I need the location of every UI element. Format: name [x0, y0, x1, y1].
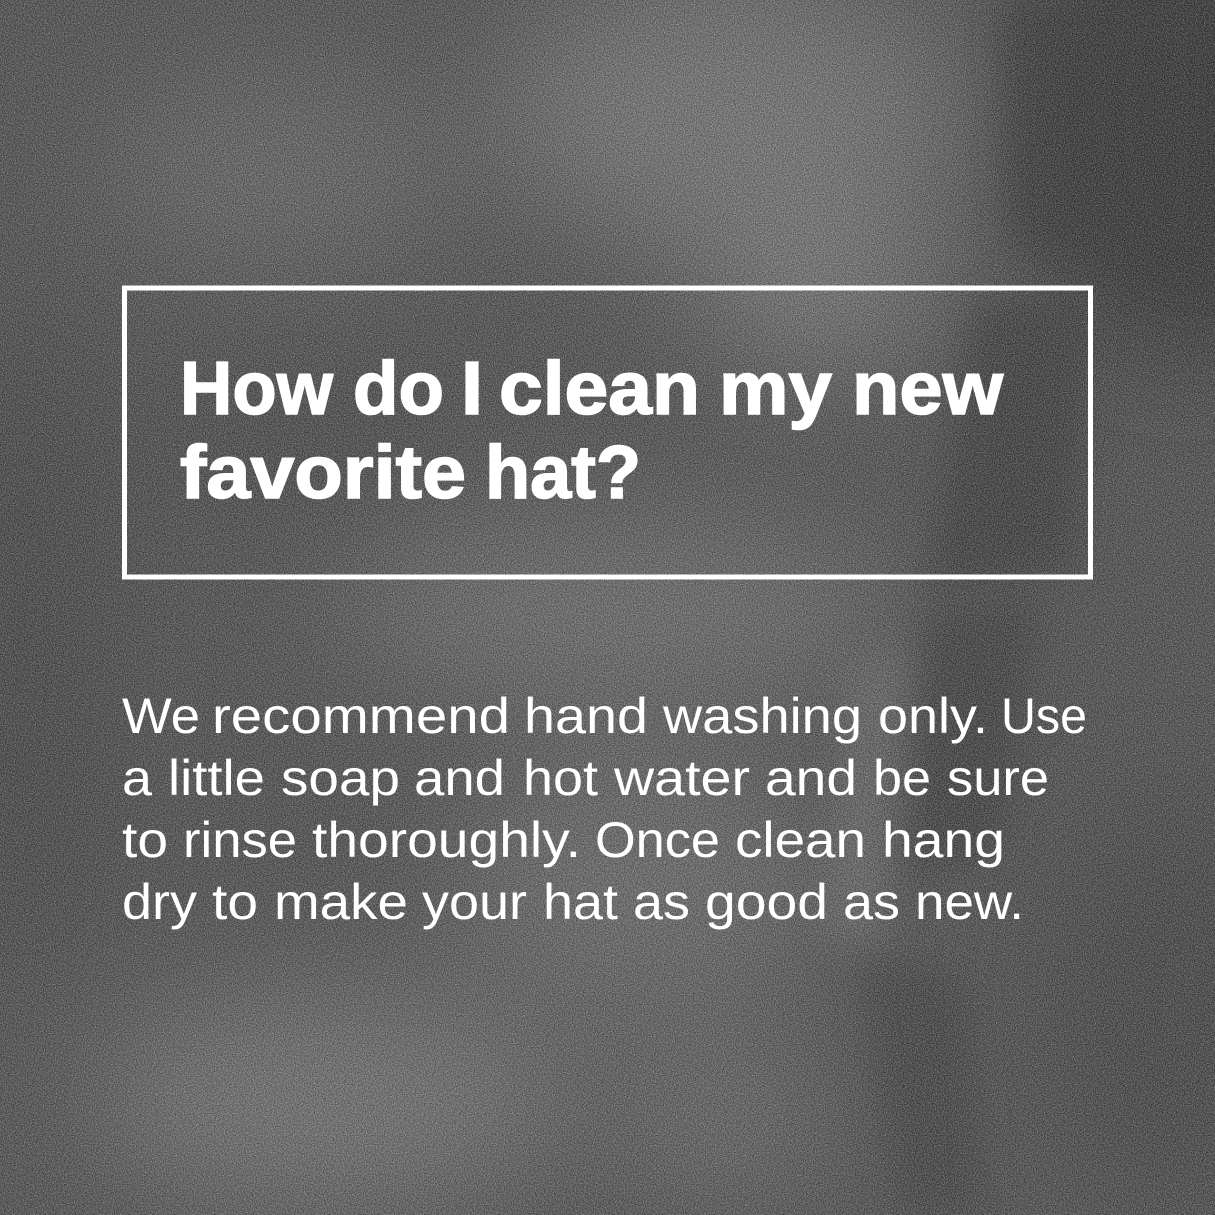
body paragraph: thoroughly. — [312, 812, 581, 868]
heading: hat? — [485, 430, 641, 514]
body paragraph: dry — [122, 874, 197, 930]
body paragraph: soap — [281, 750, 400, 806]
body paragraph: your — [422, 874, 527, 930]
body paragraph: Use — [1001, 688, 1087, 744]
heading: favorite — [180, 430, 466, 514]
body paragraph: We — [122, 688, 200, 744]
body paragraph: only. — [878, 688, 988, 744]
heading: I — [461, 346, 483, 430]
body paragraph: and — [414, 750, 505, 806]
body paragraph: sure — [947, 750, 1049, 806]
heading: new — [852, 346, 1004, 430]
heading — [180, 346, 1004, 514]
body paragraph: good — [705, 874, 828, 930]
body paragraph: washing — [662, 688, 862, 744]
body paragraph: as — [633, 874, 690, 930]
heading: my — [719, 346, 832, 430]
body paragraph: hang — [882, 812, 1005, 868]
body paragraph: rinse — [183, 812, 297, 868]
body paragraph: little — [168, 750, 265, 806]
body paragraph: be — [873, 750, 931, 806]
heading: How — [180, 346, 334, 430]
body paragraph: new. — [915, 874, 1024, 930]
body paragraph: make — [274, 874, 408, 930]
body paragraph: water — [613, 750, 750, 806]
body paragraph — [122, 688, 1087, 930]
body paragraph: to — [212, 874, 258, 930]
body paragraph: hat — [543, 874, 618, 930]
body paragraph: hand — [524, 688, 648, 744]
body paragraph: recommend — [212, 688, 510, 744]
body paragraph: a — [122, 750, 152, 806]
body paragraph: as — [843, 874, 900, 930]
heading: clean — [499, 346, 700, 430]
body paragraph: hot — [523, 750, 598, 806]
body paragraph: Once — [595, 812, 720, 868]
body paragraph: to — [122, 812, 168, 868]
body paragraph: and — [765, 750, 857, 806]
heading box outline — [124, 288, 1090, 577]
heading: do — [353, 346, 444, 430]
body paragraph: clean — [735, 812, 866, 868]
